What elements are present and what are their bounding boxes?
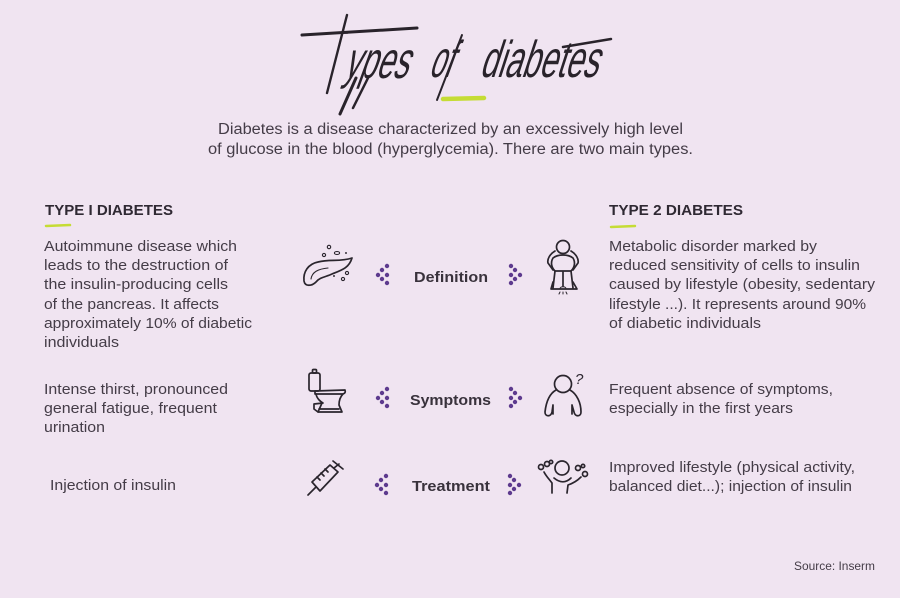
type 2 treatment	[609, 459, 855, 495]
icon: questioning person	[545, 371, 584, 416]
type 1 definition: the insulin-producing cells	[44, 276, 228, 293]
label: symptoms: Symptoms	[410, 392, 491, 409]
dots: definition right	[509, 264, 522, 285]
label: definition: Definition	[414, 269, 488, 286]
type 1 definition: of the pancreas. It affects	[44, 296, 219, 313]
intro text: Diabetes is a disease characterized by an excessively high level	[218, 121, 683, 138]
type 1 definition	[44, 238, 253, 351]
type 1 symptoms	[44, 381, 228, 436]
type 1 definition: Autoimmune disease which	[44, 238, 237, 255]
source: Source: Inserm	[794, 561, 875, 573]
dots: treatment left	[375, 474, 388, 495]
type 2 symptoms: Frequent absence of symptoms,	[609, 381, 833, 398]
icon: overweight person on scale	[548, 240, 578, 294]
icon: toilet	[309, 370, 345, 412]
title underline	[443, 98, 484, 99]
dots: symptoms left	[376, 387, 389, 408]
type 2 symptoms: especially in the first years	[609, 400, 793, 417]
intro text: of glucose in the blood (hyperglycemia). There are two main types.	[208, 141, 693, 158]
type 1 symptoms: urination	[44, 419, 105, 436]
type 2 definition: of diabetic individuals	[609, 315, 761, 332]
icon: questioning person: ?	[575, 371, 584, 388]
heading: type 1: TYPE I DIABETES	[45, 203, 173, 219]
type 1 treatment: Injection of insulin	[50, 477, 176, 494]
type 2 definition: lifestyle ...). It represents around 90%	[609, 296, 866, 313]
icon: pancreas	[304, 245, 352, 285]
title: ypes	[339, 32, 423, 90]
type 2 treatment: Improved lifestyle (physical activity,	[609, 459, 855, 476]
intro text	[208, 121, 693, 158]
type 1 symptoms: Intense thirst, pronounced	[44, 381, 228, 398]
type 2 definition: reduced sensitivity of cells to insulin	[609, 257, 860, 274]
title: of	[424, 32, 468, 89]
label: treatment: Treatment	[412, 478, 490, 495]
title: diabetes	[475, 31, 612, 89]
title	[302, 15, 612, 114]
icon: person lifting weights	[538, 460, 588, 493]
type 1 symptoms: general fatigue, frequent	[44, 400, 218, 417]
type 2 definition: caused by lifestyle (obesity, sedentary	[609, 276, 876, 293]
heading: type 2	[609, 203, 743, 227]
dots: symptoms right	[509, 387, 522, 408]
type 1 definition: leads to the destruction of	[44, 257, 229, 274]
title: T	[332, 29, 349, 51]
heading: type 2: TYPE 2 DIABETES	[609, 203, 743, 219]
type 2 definition	[609, 238, 876, 332]
icon: syringe	[308, 461, 343, 495]
type 1 definition: approximately 10% of diabetic	[44, 315, 253, 332]
dots: treatment right	[508, 474, 521, 495]
type 2 symptoms	[609, 381, 833, 417]
type 2 definition: Metabolic disorder marked by	[609, 238, 818, 255]
type 2 treatment: balanced diet...); injection of insulin	[609, 478, 852, 495]
heading: type 1	[45, 203, 173, 226]
type 1 definition: individuals	[44, 334, 119, 351]
dots: definition left	[376, 264, 389, 285]
